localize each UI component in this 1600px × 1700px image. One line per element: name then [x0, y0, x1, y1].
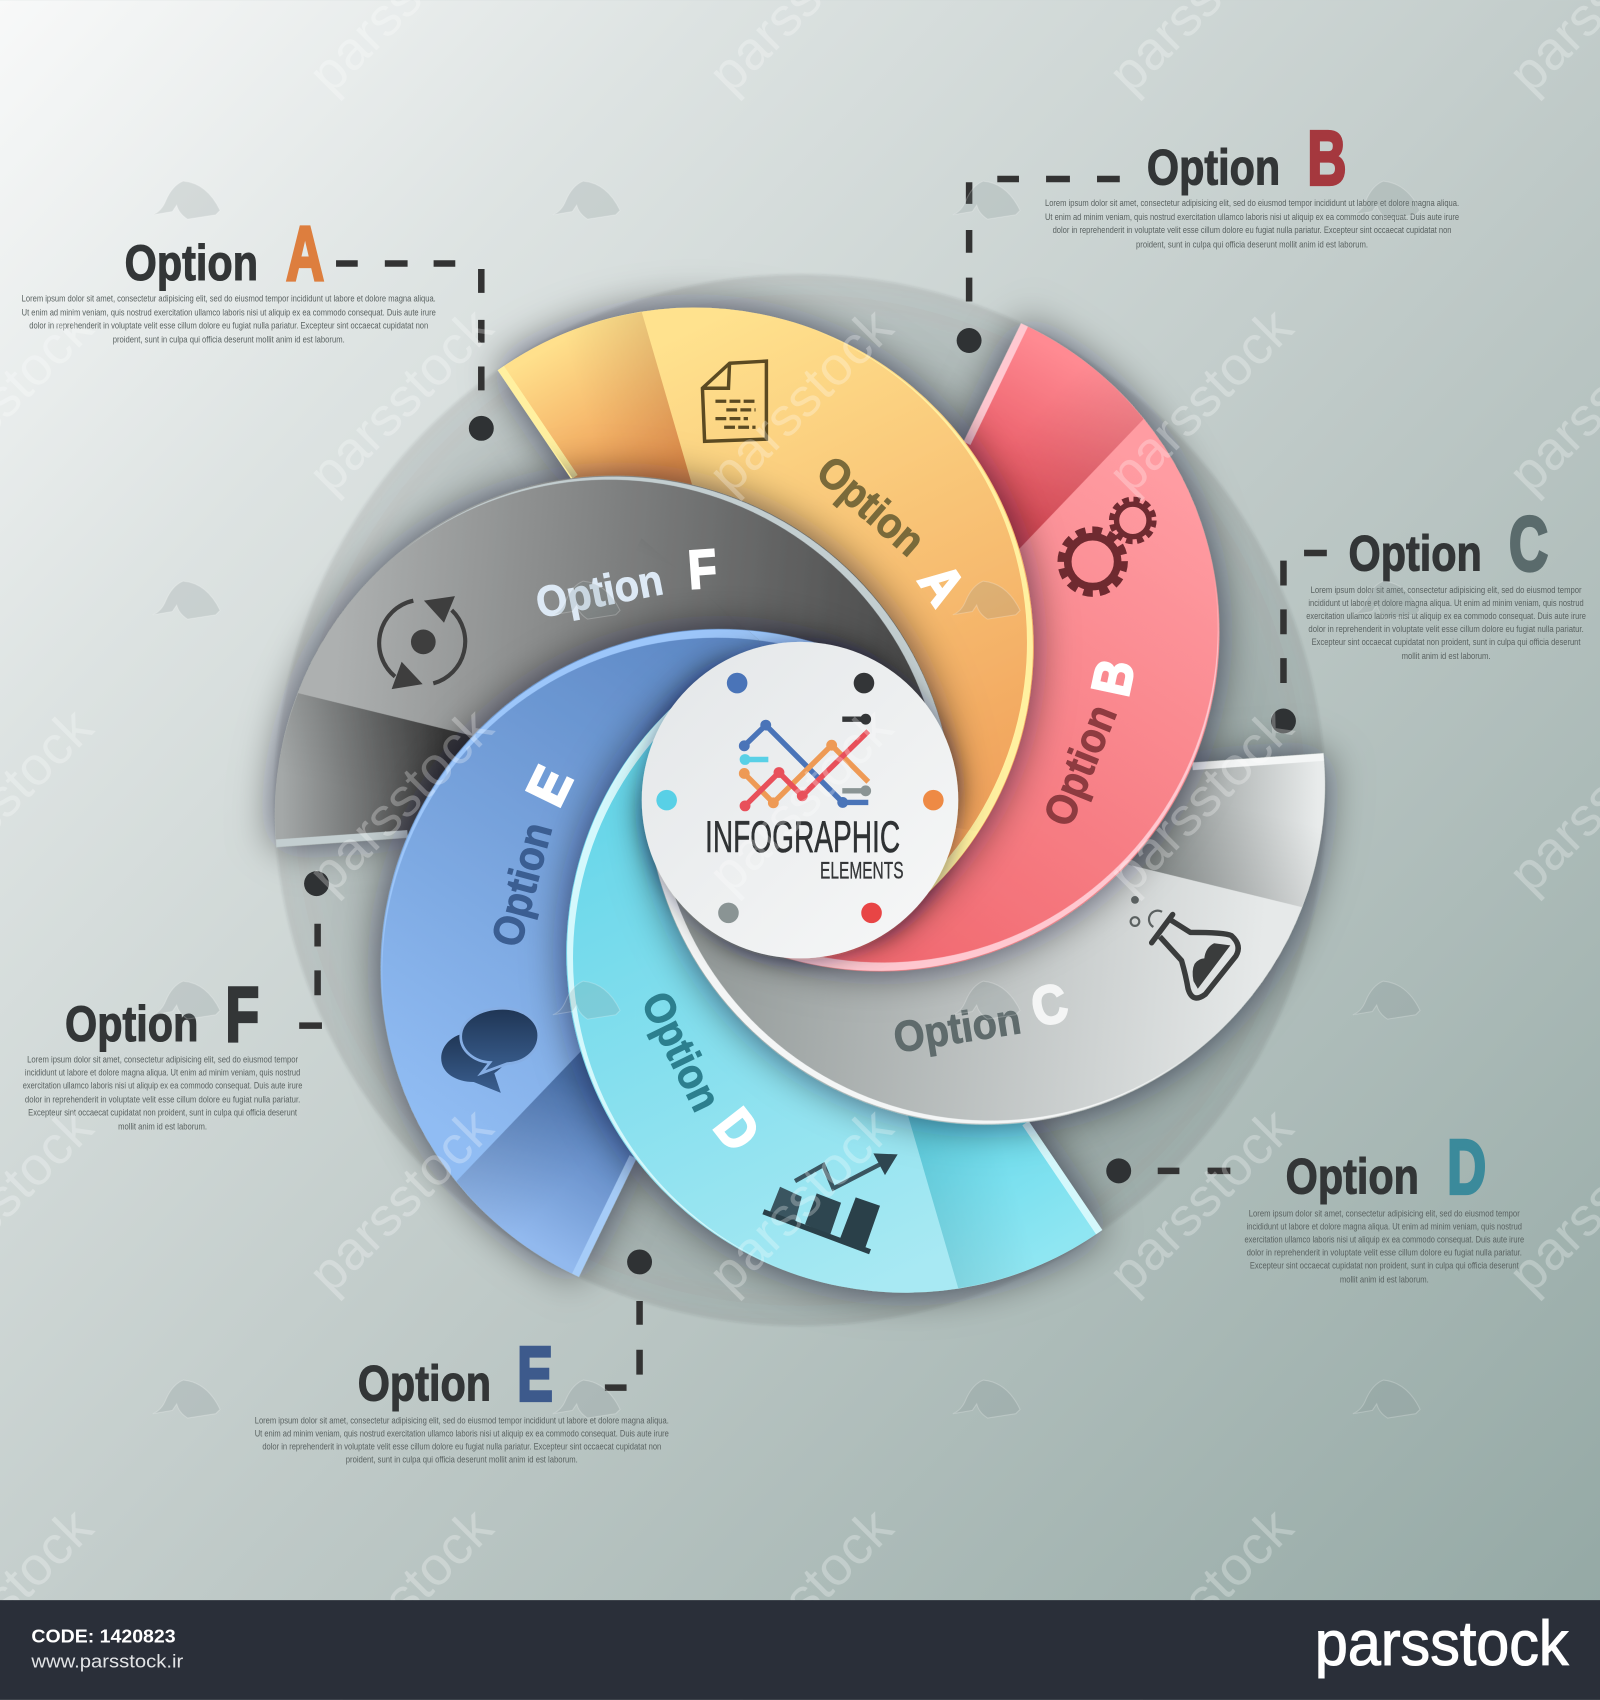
segment A: yellow-orange [499, 308, 1034, 941]
heading: Option D: D [1447, 1125, 1486, 1211]
icon: growth chart [763, 1153, 898, 1252]
connector F [299, 871, 329, 1026]
segment label: Option B: B [1081, 655, 1147, 701]
footer logo: parsstock [1315, 1609, 1569, 1679]
central dots [656, 673, 944, 923]
watermark text grid: parsstock [297, 1497, 505, 1700]
watermark text grid: parsstock [297, 1097, 505, 1304]
text block D: mollit anim id est laborum. [1340, 1275, 1429, 1286]
segment label: Option D: D [702, 1098, 771, 1162]
heading: Option F [65, 972, 259, 1058]
text block B [1045, 198, 1459, 250]
watermark text grid: parsstock [297, 697, 505, 904]
footer url: www.parsstock.ir [30, 1650, 183, 1671]
text block F: Excepteur sint occaecat cupidatat non proident, sunt in culpa qui officia deserunt [28, 1108, 297, 1119]
heading: Option A: A [286, 211, 324, 297]
icon: flask [1131, 896, 1238, 998]
footer bar [0, 1600, 1600, 1700]
center title: INFOGRAPHIC [705, 813, 900, 862]
text block B: Lorem ipsum dolor sit amet, consectetur adipisicing elit, sed do eiusmod tempor incididunt ut labore et dolore magna aliqua. [1045, 198, 1459, 209]
text block A: Ut enim ad minim veniam, quis nostrud exercitation ullamco laboris nisi ut aliquip ex ea commodo consequat. Duis aute irure [22, 308, 436, 319]
text block F [23, 1054, 302, 1133]
text block D: dolor in reprehenderit in voluptate velit esse cillum dolore eu fugiat nulla pariatur. [1247, 1247, 1522, 1258]
heading: Option B: Option [1147, 139, 1280, 195]
text block A [22, 293, 436, 346]
segment C: light grey [561, 469, 1377, 1249]
heading: Option A [125, 211, 324, 297]
segment label: Option A: Option [807, 447, 934, 566]
watermark text grid: parsstock [1097, 297, 1305, 504]
text block F: incididunt ut labore et dolore magna aliqua. Ut enim ad minim veniam, quis nostrud [25, 1067, 300, 1078]
icon: document [702, 361, 766, 441]
heading: Option C [1349, 501, 1548, 587]
text block F: exercitation ullamco laboris nisi ut aliquip ex ea commodo consequat. Duis aute irure [23, 1080, 302, 1091]
backdrop circle [274, 274, 1326, 1326]
text block B: proident, sunt in culpa qui officia deserunt mollit anim id est laborum. [1136, 239, 1368, 250]
center line chart icon [739, 714, 871, 811]
segment label: Option F: Option [532, 556, 667, 628]
text block E: proident, sunt in culpa qui officia deserunt mollit anim id est laborum. [346, 1454, 578, 1465]
heading: Option D [1286, 1125, 1486, 1211]
text block A: Lorem ipsum dolor sit amet, consectetur adipisicing elit, sed do eiusmod tempor incididunt ut labore et dolore magna aliqua. [22, 293, 436, 304]
segment label: Option E: Option [483, 818, 562, 952]
heading: Option E [358, 1332, 553, 1418]
heading: Option E: E [517, 1332, 553, 1418]
text block B: dolor in reprehenderit in voluptate velit esse cillum dolore eu fugiat nulla pariatur. Excepteur sint occaecat cupidatat non [1053, 225, 1451, 236]
segment F: dark grey [223, 351, 1039, 1131]
heading: Option C: Option [1349, 525, 1482, 581]
segment label: Option A [807, 447, 976, 616]
watermark text grid: parsstock [697, 1497, 905, 1700]
connector D [1106, 1158, 1230, 1183]
center disc [642, 642, 958, 958]
icon: gears [1062, 500, 1153, 592]
heading: Option C: C [1509, 501, 1548, 587]
segment label: Option B: Option [1035, 698, 1127, 833]
text block A: proident, sunt in culpa qui officia deserunt mollit anim id est laborum. [113, 335, 345, 346]
icon: refresh [379, 596, 465, 689]
text block E [255, 1415, 669, 1465]
text block F: dolor in reprehenderit in voluptate velit esse cillum dolore eu fugiat nulla pariatur. [25, 1095, 300, 1106]
segment label: Option C [890, 972, 1073, 1063]
center subtitle: ELEMENTS [820, 858, 904, 885]
segment label: Option A: A [907, 554, 976, 616]
watermark text grid: parsstock [1097, 1497, 1305, 1700]
text block D: Lorem ipsum dolor sit amet, consectetur adipisicing elit, sed do eiusmod tempor [1249, 1208, 1520, 1219]
segment label: Option E [483, 757, 585, 952]
watermark text grid: parsstock [697, 697, 905, 904]
text block D: incididunt ut labore et dolore magna aliqua. Ut enim ad minim veniam, quis nostrud [1247, 1221, 1522, 1232]
text block F: Lorem ipsum dolor sit amet, consectetur adipisicing elit, sed do eiusmod tempor [27, 1054, 299, 1065]
segment D: cyan [566, 659, 1101, 1293]
text block F: mollit anim id est laborum. [118, 1122, 207, 1133]
heading: Option F: Option [65, 996, 198, 1052]
watermark text grid: parsstock [697, 297, 905, 504]
watermark text grid: parsstock [1097, 697, 1305, 904]
watermark text grid: parsstock [697, 1097, 905, 1304]
text block E: Ut enim ad minim veniam, quis nostrud exercitation ullamco laboris nisi ut aliquip ex ea commodo consequat. Duis aute irure [255, 1428, 669, 1439]
cyclic overlap: segments F and E above segment A [542, 445, 982, 828]
icon: speech bubbles [441, 1008, 539, 1093]
watermark elephants [153, 181, 1420, 1418]
heading: Option E: Option [358, 1356, 491, 1412]
segment label: Option E: E [515, 757, 585, 815]
footer code: CODE: 1420823 [31, 1625, 176, 1646]
text block A: dolor in reprehenderit in voluptate velit esse cillum dolore eu fugiat nulla pariatur. Excepteur sint occaecat cupidatat non [29, 321, 428, 332]
text block C: mollit anim id est laborum. [1402, 651, 1491, 662]
segment label: Option D: Option [632, 985, 730, 1119]
text block D: exercitation ullamco laboris nisi ut aliquip ex ea commodo consequat. Duis aute irure [1244, 1234, 1524, 1245]
segment label: Option C: Option [890, 995, 1024, 1063]
segment B: red [528, 293, 1343, 1073]
text block E: dolor in reprehenderit in voluptate velit esse cillum dolore eu fugiat nulla pariatur. Excepteur sint occaecat cupidatat non [262, 1441, 661, 1452]
heading: Option B [1147, 115, 1346, 201]
segment label: Option F [532, 539, 719, 628]
segment label: Option F: F [686, 539, 719, 601]
text block D: Excepteur sint occaecat cupidatat non proident, sunt in culpa qui officia deserunt [1250, 1260, 1519, 1271]
watermark text grid: parsstock [297, 297, 505, 504]
segment label: Option C: C [1026, 972, 1073, 1039]
segment label: Option D [632, 985, 771, 1162]
watermark text grid: parsstock [1097, 1097, 1305, 1304]
spiral wheel [223, 293, 1377, 1307]
segment E: blue [257, 527, 1072, 1307]
text block E: Lorem ipsum dolor sit amet, consectetur adipisicing elit, sed do eiusmod tempor incididunt ut labore et dolore magna aliqua. [255, 1415, 669, 1426]
connector C [1271, 553, 1327, 733]
connector A [336, 264, 494, 441]
heading: Option D: Option [1286, 1149, 1419, 1205]
connector B [957, 179, 1120, 353]
text block B: Ut enim ad minim veniam, quis nostrud exercitation ullamco laboris nisi ut aliquip ex ea commodo consequat. Duis aute irure [1045, 212, 1459, 223]
heading: Option F: F [225, 972, 259, 1058]
text block D [1244, 1208, 1524, 1286]
heading: Option A: Option [125, 235, 258, 291]
connector E [605, 1249, 652, 1388]
text block C [1306, 585, 1586, 662]
heading: Option B: B [1307, 115, 1346, 201]
